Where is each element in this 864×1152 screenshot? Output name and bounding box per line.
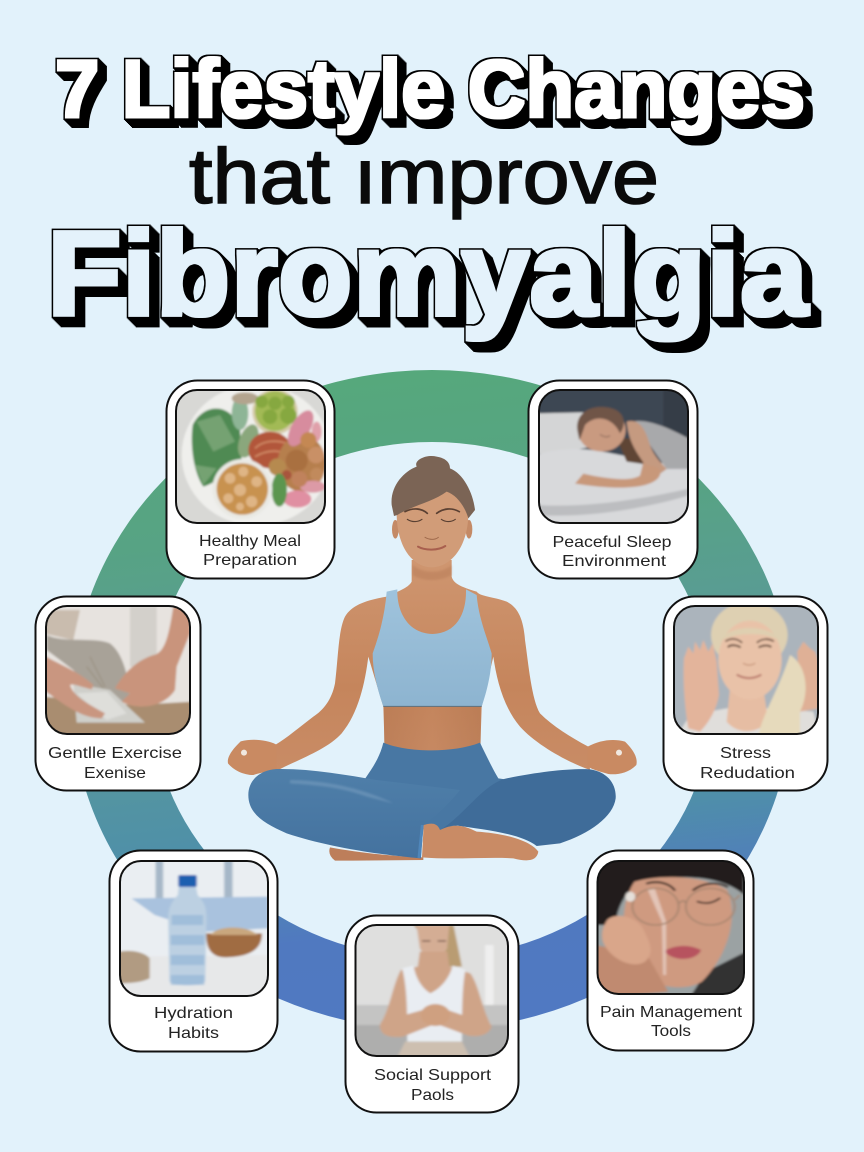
title (47, 44, 809, 341)
photo: calm woman with raised hands (675, 607, 817, 733)
figure: hair (392, 456, 475, 518)
figure: right leg (440, 769, 616, 846)
photo: water bottle (117, 858, 270, 998)
label: Hydration (154, 1005, 233, 1022)
figure: finger rings (241, 750, 622, 756)
central meditating figure (228, 456, 637, 861)
panel: Social Support (346, 916, 518, 1112)
label: Gentlle Exercise (48, 745, 182, 762)
figure: legging cuff (419, 825, 422, 858)
figure: front foot (422, 824, 538, 860)
figure: arms, torso and neck (275, 560, 590, 772)
figure: abdomen shading (384, 707, 481, 753)
figure: facial features (405, 509, 459, 550)
gradient ring (72, 370, 792, 1030)
figure: right hand (588, 740, 637, 774)
photo: sleeping woman (537, 388, 690, 525)
label: Pain Management (600, 1004, 743, 1021)
photo: hands on a mat (47, 607, 189, 733)
figure: face (397, 488, 468, 567)
figure: left leg (248, 769, 460, 858)
panel: Hydration Habits (110, 850, 278, 1052)
label: Environment (562, 553, 667, 570)
title line: Fibromyalgia: Fibromyalgia (47, 207, 809, 341)
figure: leg highlight (290, 780, 393, 803)
label: Exenise (84, 765, 146, 782)
title line: 7 Lifestyle Changes: 7 Lifestyle Changes (55, 44, 805, 135)
figure: top hem (383, 705, 482, 708)
figure: legging waist and seat (365, 743, 510, 832)
photo: woman with glasses (598, 862, 743, 993)
figure: sports top (373, 589, 492, 707)
panel: Gentle Exercise (36, 596, 200, 790)
label: Tools (651, 1023, 691, 1040)
figure: back foot (329, 847, 423, 861)
label: Social Support (374, 1067, 492, 1084)
label: Preparation (203, 552, 297, 569)
title line: that improve: that ımprove (189, 132, 659, 220)
photo: woman with clasped hands (356, 926, 507, 1055)
panel: Pain Management Tools (588, 850, 754, 1050)
panel: Peaceful Sleep Environment (528, 380, 698, 578)
panel: Stress Reduction (664, 596, 828, 790)
label: Habits (168, 1025, 219, 1042)
label: Healthy Meal (199, 533, 301, 550)
label: Peaceful Sleep (552, 534, 672, 551)
label: Paols (411, 1087, 454, 1104)
figure: ears (392, 520, 472, 539)
figure: neck shadow (413, 565, 452, 580)
figure: left hand (228, 740, 277, 775)
panel: Healthy Meal Preparation (166, 380, 334, 578)
photo: healthy meal plate (177, 391, 324, 522)
label: Redudation (700, 765, 795, 782)
label: Stress (720, 745, 771, 762)
